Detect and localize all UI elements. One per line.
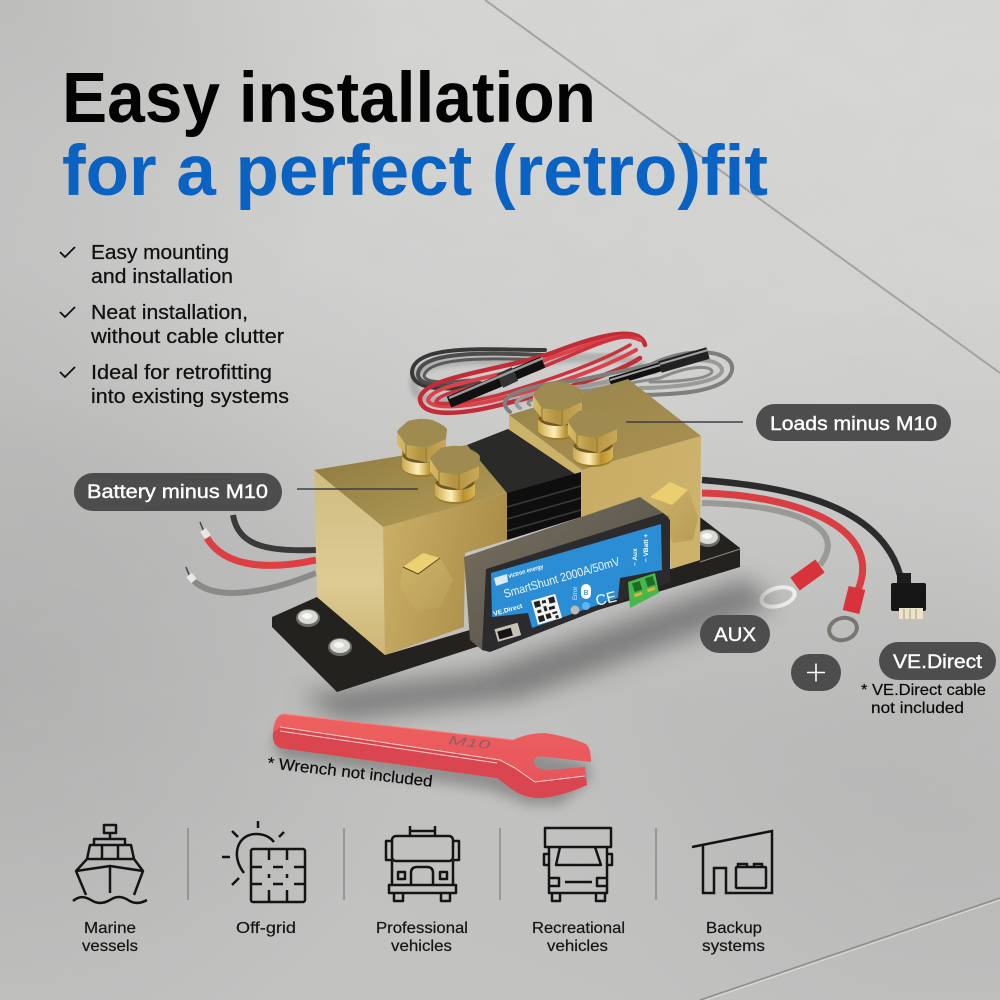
feature checklist [60,242,289,408]
label: loads minus [756,404,951,441]
application labels: Backup [706,920,762,937]
leader line: battery [297,488,418,490]
module label: victron energy [508,564,545,580]
module label: SmartShunt 2000A/50mV [502,554,621,601]
base plate [272,517,740,692]
right brass block side wedge [509,415,582,517]
VE.Direct footnote [861,682,986,717]
title: for a perfect (retro)fit [62,132,768,211]
application labels: vehicles [547,938,608,955]
label: AUX: AUX [714,625,756,646]
inline fuse holders [449,350,708,402]
icon: off-grid solar [222,821,305,902]
divider lines [188,828,656,900]
leader line: loads [626,421,743,423]
QR code [531,594,562,625]
label: plus [791,654,841,691]
application labels: Off-grid [236,920,296,937]
black shunt fins [467,429,581,540]
application labels: vessels [82,938,138,955]
feature checklist: without cable clutter [90,326,284,348]
icon: backup systems [692,831,772,893]
feature checklist: Easy mounting [91,242,229,264]
module label: Error [573,587,579,600]
wrench [273,714,591,805]
application labels [82,920,765,955]
application labels: Professional [376,920,468,937]
label: loads minus: Loads minus M10 [770,414,937,435]
module label: ʙ [584,587,589,597]
wrench footnote: * Wrench not included [267,755,433,791]
feature checklist: Neat installation, [91,302,248,324]
application labels: Recreational [532,920,625,937]
module label: CE [594,588,618,610]
icon: recreational vehicle [544,828,612,901]
application labels: systems [702,938,765,955]
wrench: M10 [448,733,492,752]
icon: professional vehicle [386,826,459,901]
VE.Direct port [494,623,521,642]
application labels: Marine [84,920,136,937]
left brass block [314,419,507,655]
green terminal [628,573,659,608]
label: AUX [700,615,770,653]
VE.Direct footnote: not included [871,700,964,717]
label: VE.Direct: VE.Direct [893,652,983,673]
cables exiting left with ferrules [186,515,316,593]
application labels: vehicles [391,938,452,955]
SmartShunt module: − VBatt + [643,534,650,562]
icon: marine vessel [73,825,147,903]
feature checklist: and installation [91,266,233,288]
label: VE.Direct [879,642,996,680]
label: battery minus: Battery minus M10 [87,482,268,503]
cable bundle behind the shunt [412,334,732,413]
title: Easy installation [62,59,596,138]
SmartShunt module [464,497,670,652]
VE.Direct footnote: * VE.Direct cable [861,682,986,699]
module label: VE.Direct [493,603,524,618]
right brass block [509,379,701,569]
feature checklist: Ideal for retrofitting [91,362,272,384]
SmartShunt module: − Aux [632,548,639,566]
cables exiting right with ring terminals [702,480,926,643]
module label [491,524,662,628]
device shadow [300,578,775,720]
title [62,59,768,211]
label: battery minus [74,473,282,511]
feature checklist: into existing systems [91,386,289,408]
